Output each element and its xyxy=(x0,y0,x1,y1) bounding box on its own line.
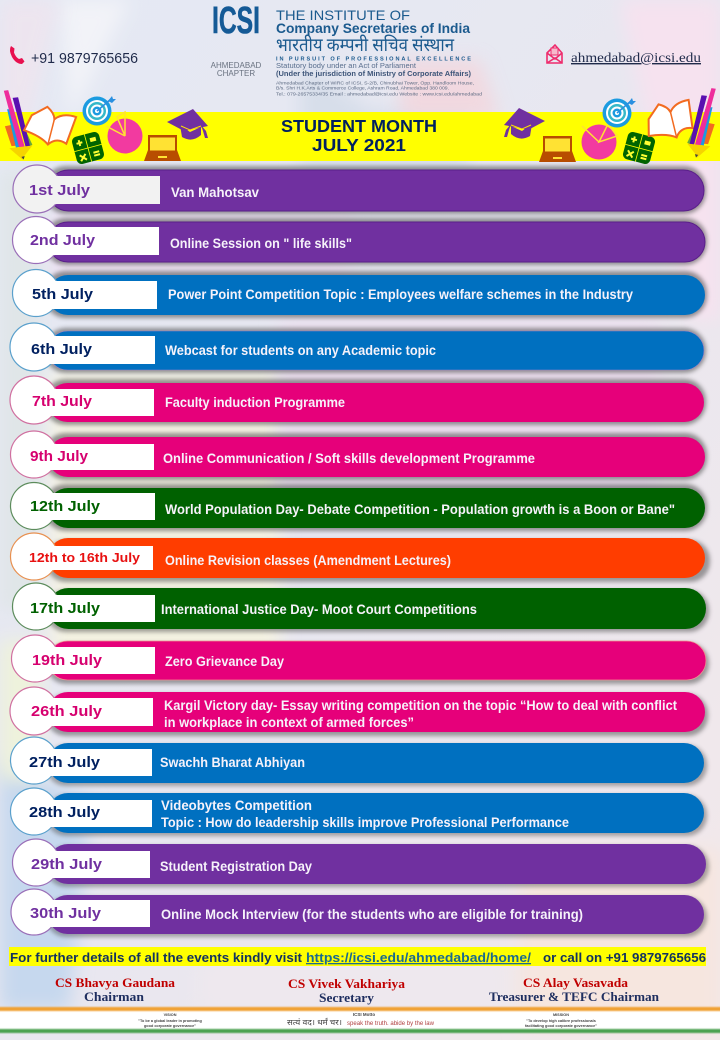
institute letterhead: Statutory body under an Act of Parliament xyxy=(276,61,417,70)
panel: 9th July event: Online Communication / Soft skills development Programme xyxy=(163,451,535,466)
vision: VISION xyxy=(164,1013,177,1017)
panel: 28th July event: Videobytes Competition xyxy=(161,798,312,813)
further details strip: For further details of all the events kindly visit xyxy=(10,950,303,965)
panel: 27th July event xyxy=(10,737,707,786)
contact: email xyxy=(547,45,701,66)
vision xyxy=(138,1013,202,1028)
institute letterhead: IN PURSUIT OF PROFESSIONAL EXCELLENCE xyxy=(276,56,471,62)
panel: 12th July event: 12th July xyxy=(30,498,101,515)
icons: right study set xyxy=(504,88,716,165)
icon: email xyxy=(547,45,562,63)
panel: 9th July event xyxy=(10,431,707,480)
institute letterhead: THE INSTITUTE OF xyxy=(276,7,410,23)
mission xyxy=(525,1013,597,1028)
institute letterhead: Ahmedabad Chapter of WIRC of ICSI, S-2/B, Chinubhai Tower, Opp. Handloom House, xyxy=(276,80,474,86)
contact: email: ahmedabad@icsi.edu xyxy=(571,51,701,66)
panel: 29th July event xyxy=(12,839,709,887)
panel: 7th July event xyxy=(10,376,706,425)
vision: good corporate governance" xyxy=(144,1024,196,1028)
signatory: chairman xyxy=(55,975,176,1004)
panel: 30th July event xyxy=(11,889,707,937)
panel: 1st July event: Van Mahotsav xyxy=(171,185,259,200)
panel: 26th July event xyxy=(10,687,708,736)
panel: 26th July event: in workplace in context of armed forces” xyxy=(164,715,414,730)
chapter label: AHMEDABAD xyxy=(211,61,262,70)
panel: 28th July event: Topic : How do leadership skills improve Professional Performance xyxy=(161,815,569,830)
institute letterhead: (Under the jurisdiction of Ministry of Corporate Affairs) xyxy=(276,69,471,78)
mission: "To develop high calibre professionals xyxy=(526,1019,596,1023)
panel: 7th July event: 7th July xyxy=(32,393,93,410)
heading: STUDENT MONTH xyxy=(281,116,437,136)
further details strip: https://icsi.edu/ahmedabad/home/ xyxy=(306,950,531,965)
panel: 17th July event: International Justice Day- Moot Court Competitions xyxy=(161,602,477,617)
panel: 17th July event: 17th July xyxy=(30,600,101,617)
contact: phone: +91 9879765656 xyxy=(31,51,138,67)
panel: 2nd July event: Online Session on " life skills" xyxy=(170,236,352,251)
panel: 5th July event: 5th July xyxy=(32,286,94,303)
motto xyxy=(287,1012,435,1027)
institute letterhead: Company Secretaries of India xyxy=(276,20,470,36)
motto: सत्यं वद। धर्मं चर। xyxy=(287,1017,342,1027)
panel: 29th July event: 29th July xyxy=(31,856,103,873)
motto: speak the truth. abide by the law xyxy=(347,1021,435,1027)
panel: 12th July event: World Population Day- Debate Competition - Population growth is a Boon or Bane" xyxy=(165,502,675,517)
panel: 6th July event: Webcast for students on any Academic topic xyxy=(165,343,436,358)
panel: 12th to 16th July event: 12th to 16th July xyxy=(29,550,141,565)
signatory: treasurer: CS Alay Vasavada xyxy=(523,975,629,990)
panel: 19th July event: Zero Grievance Day xyxy=(165,654,284,669)
icon: phone xyxy=(10,46,24,64)
further details strip: or call on +91 9879765656 xyxy=(543,950,706,965)
heading xyxy=(281,116,437,155)
institute letterhead: Tel.: 079-26575334/35 Email : ahmedabad@icsi.edu Website : www.icsi.edu/ahmedabad xyxy=(276,92,482,96)
panel: 6th July event: 6th July xyxy=(31,341,93,358)
signatory: chairman: CS Bhavya Gaudana xyxy=(55,975,176,990)
footer tricolor band xyxy=(0,1007,720,1033)
panel: 27th July event: 27th July xyxy=(29,754,101,771)
signatory: chairman: Chairman xyxy=(84,989,145,1004)
mission: facilitating good corporate governance" xyxy=(525,1024,597,1028)
panel: 17th July event xyxy=(12,583,709,632)
chapter label: CHAPTER xyxy=(217,69,255,78)
icons: left study set xyxy=(4,90,208,165)
panel: 12th to 16th July event: Online Revision classes (Amendment Lectures) xyxy=(165,553,451,568)
signatory: secretary xyxy=(288,976,406,1005)
title banner xyxy=(0,112,720,161)
panel: 5th July event: Power Point Competition Topic : Employees welfare schemes in the Industry xyxy=(168,287,633,302)
institute letterhead: B/s. Shri H.K.Arts & Commerce College, Ashram Road, Ahmedabad 380 009. xyxy=(276,86,449,90)
panel: 2nd July event xyxy=(12,216,707,265)
chapter label xyxy=(211,61,262,78)
contact: phone xyxy=(10,46,138,67)
panel: 30th July event: Online Mock Interview (for the students who are eligible for training) xyxy=(161,907,583,922)
panel: 9th July event: 9th July xyxy=(30,448,89,465)
panel: 12th to 16th July event xyxy=(10,533,710,582)
panel: 27th July event: Swachh Bharat Abhiyan xyxy=(160,755,305,770)
signatory: treasurer: Treasurer & TEFC Chairman xyxy=(489,989,660,1004)
panel: 26th July event: 26th July xyxy=(31,703,103,720)
heading: JULY 2021 xyxy=(312,135,406,155)
signatory: treasurer xyxy=(489,975,660,1004)
mission: MISSION xyxy=(553,1013,569,1017)
signatory: secretary: Secretary xyxy=(319,990,375,1005)
panel: 28th July event: 28th July xyxy=(29,804,101,821)
motto: ICSI Motto xyxy=(353,1012,375,1017)
panel: 28th July event xyxy=(10,788,707,836)
panel: 1st July event: 1st July xyxy=(29,182,91,199)
panel: 26th July event: Kargil Victory day- Essay writing competition on the topic “How to deal with conflict xyxy=(164,698,677,713)
logo: ICSI: ICSI xyxy=(212,0,260,42)
panel: 7th July event: Faculty induction Programme xyxy=(165,395,345,410)
panel: 30th July event: 30th July xyxy=(30,905,102,922)
panel: 2nd July event: 2nd July xyxy=(30,232,96,249)
panel: 6th July event xyxy=(10,323,706,373)
panel: 12th July event xyxy=(10,482,707,531)
panel: 1st July event xyxy=(13,165,706,214)
panel: 19th July event: 19th July xyxy=(32,652,103,669)
panel: 5th July event xyxy=(12,270,707,318)
signatory: secretary: CS Vivek Vakhariya xyxy=(288,976,406,991)
institute letterhead: भारतीय कम्पनी सचिव संस्थान xyxy=(276,35,455,55)
vision: "To be a global leader in promoting xyxy=(138,1019,202,1023)
panel: 29th July event: Student Registration Day xyxy=(160,859,312,874)
institute letterhead xyxy=(276,7,482,96)
further details strip xyxy=(9,947,706,966)
panel: 19th July event xyxy=(12,635,709,684)
